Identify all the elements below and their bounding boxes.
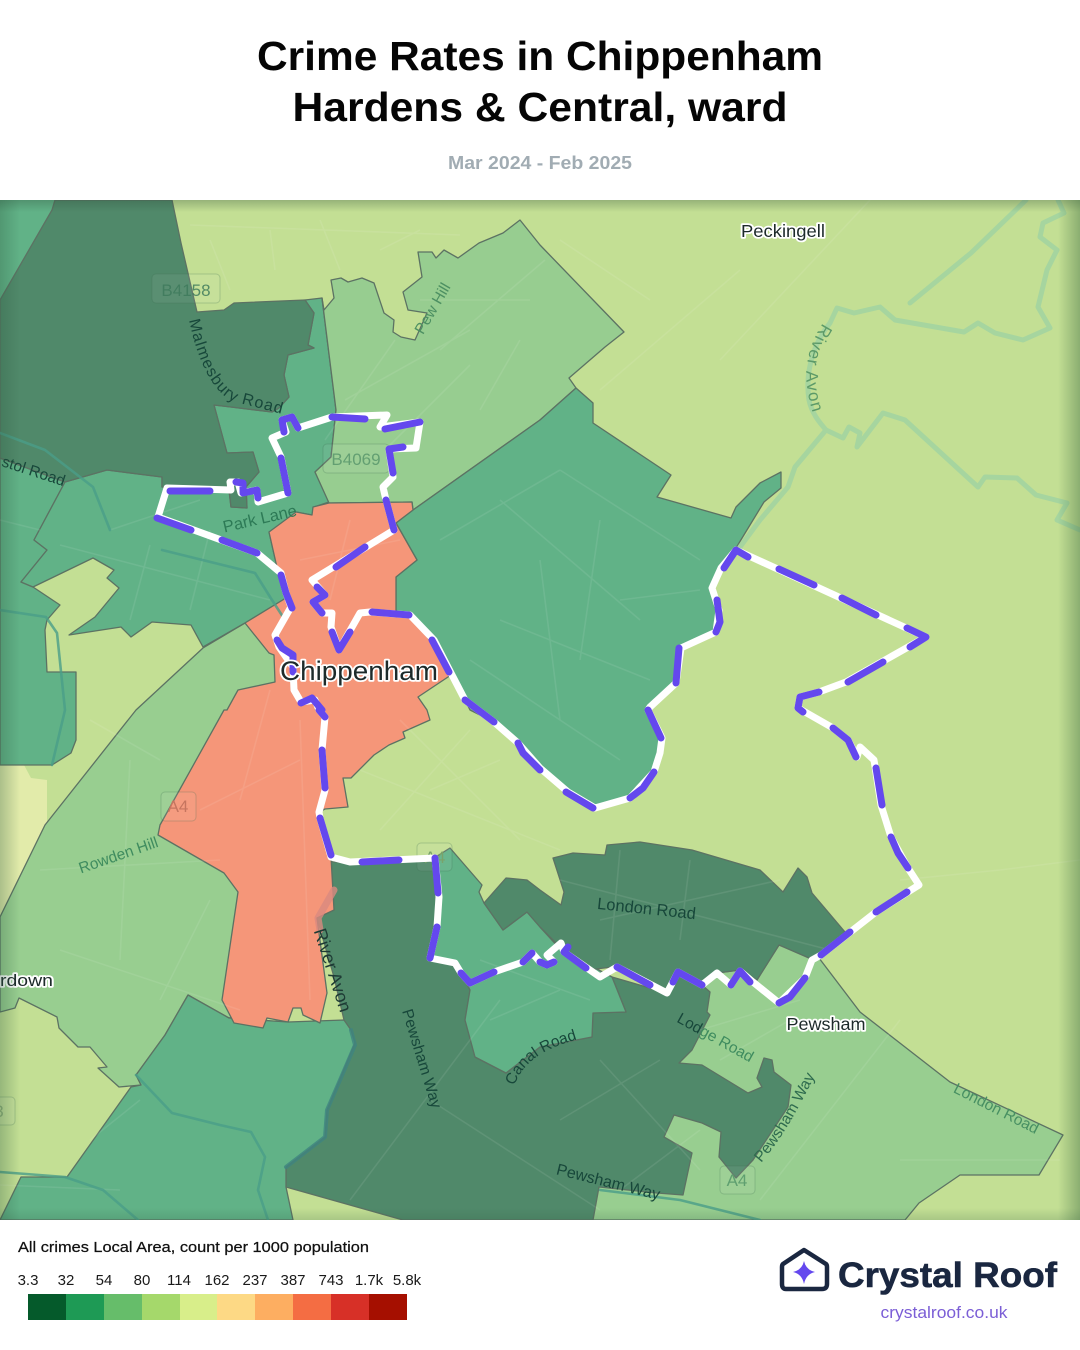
place label: Chippenham: Chippenham xyxy=(280,656,438,686)
legend heading: All crimes Local Area, count per 1000 population xyxy=(18,1239,369,1256)
choropleth map xyxy=(0,200,1080,1220)
map labels: River Avon xyxy=(310,926,356,1014)
road badges: A4 xyxy=(727,1171,747,1190)
map labels: Lodge Road xyxy=(674,1010,756,1066)
road badges: A4 xyxy=(168,797,188,816)
map labels: London Road xyxy=(951,1080,1041,1138)
region: north west medium xyxy=(21,298,336,647)
region: pale yellow west edge xyxy=(0,765,47,917)
region: north west dark xyxy=(0,200,314,508)
logo: Crystal Roof xyxy=(782,1250,1057,1322)
region: south west medium xyxy=(0,995,355,1220)
title: Hardens & Central, ward xyxy=(292,84,788,130)
legend xyxy=(18,1239,422,1320)
region: Pewsham light green xyxy=(594,946,1064,1220)
subtitle: date range: Mar 2024 - Feb 2025 xyxy=(448,153,632,173)
legend tick labels: 32 xyxy=(58,1272,74,1289)
map labels: stol Road xyxy=(0,454,67,490)
ward boundary: white line with purple dashes xyxy=(157,415,926,1003)
road badges: A4 xyxy=(425,848,445,867)
map edge vignette xyxy=(0,200,1080,1220)
title xyxy=(257,33,823,130)
legend tick labels: 54 xyxy=(96,1272,112,1289)
region: south medium xyxy=(430,848,626,1073)
map labels: Canal Road xyxy=(506,1028,576,1084)
region: west medium block xyxy=(0,458,76,765)
map labels: Pewsham Way xyxy=(398,1007,445,1111)
map labels: rdown xyxy=(0,971,53,990)
map labels: Pewsham xyxy=(786,1014,866,1034)
legend tick labels: 1.7k xyxy=(355,1272,384,1289)
logo wordmark: Crystal Roof xyxy=(838,1256,1057,1295)
road badges: B4158 xyxy=(161,281,211,300)
region: west ring xyxy=(0,623,300,1087)
legend tick labels: 80 xyxy=(134,1272,150,1289)
legend tick labels: 3.3 xyxy=(18,1272,38,1289)
map labels: Pewsham Way xyxy=(754,1072,816,1162)
region: central salmon high crime xyxy=(158,502,451,1028)
legend tick labels: 162 xyxy=(204,1272,230,1289)
roads and streets xyxy=(0,200,1080,1210)
map labels xyxy=(0,222,1040,1202)
map labels: Malmesbury Road xyxy=(189,318,284,414)
legend tick labels: 5.8k xyxy=(393,1272,422,1289)
map labels: River Avon xyxy=(806,324,832,412)
region: top-left corner xyxy=(0,200,55,300)
legend colour scale xyxy=(28,1294,407,1320)
icon: house with star xyxy=(782,1250,827,1289)
road badges xyxy=(0,274,755,1194)
legend tick labels: 237 xyxy=(242,1272,268,1289)
logo url: crystalroof.co.uk xyxy=(880,1304,1008,1322)
rivers and streams xyxy=(0,200,1080,1220)
map labels: Park Lane xyxy=(221,502,299,536)
legend tick labels: 114 xyxy=(167,1272,191,1289)
map labels: Peckingell xyxy=(741,221,825,241)
region: London Road dark xyxy=(484,842,845,993)
region: east medium xyxy=(396,388,781,808)
legend tick labels: 743 xyxy=(318,1272,344,1289)
legend tick labels xyxy=(18,1272,422,1289)
region: south dark xyxy=(286,857,791,1220)
title: Crime Rates in Chippenham xyxy=(257,33,823,79)
map labels: London Road xyxy=(596,895,697,923)
map labels: Pewsham Way xyxy=(555,1162,662,1204)
map labels: Rowden Hill xyxy=(77,834,160,877)
map labels: Pew Hill xyxy=(412,280,454,337)
region: north light green xyxy=(315,220,624,510)
road badges: B4069 xyxy=(331,450,381,469)
legend tick labels: 387 xyxy=(280,1272,306,1289)
